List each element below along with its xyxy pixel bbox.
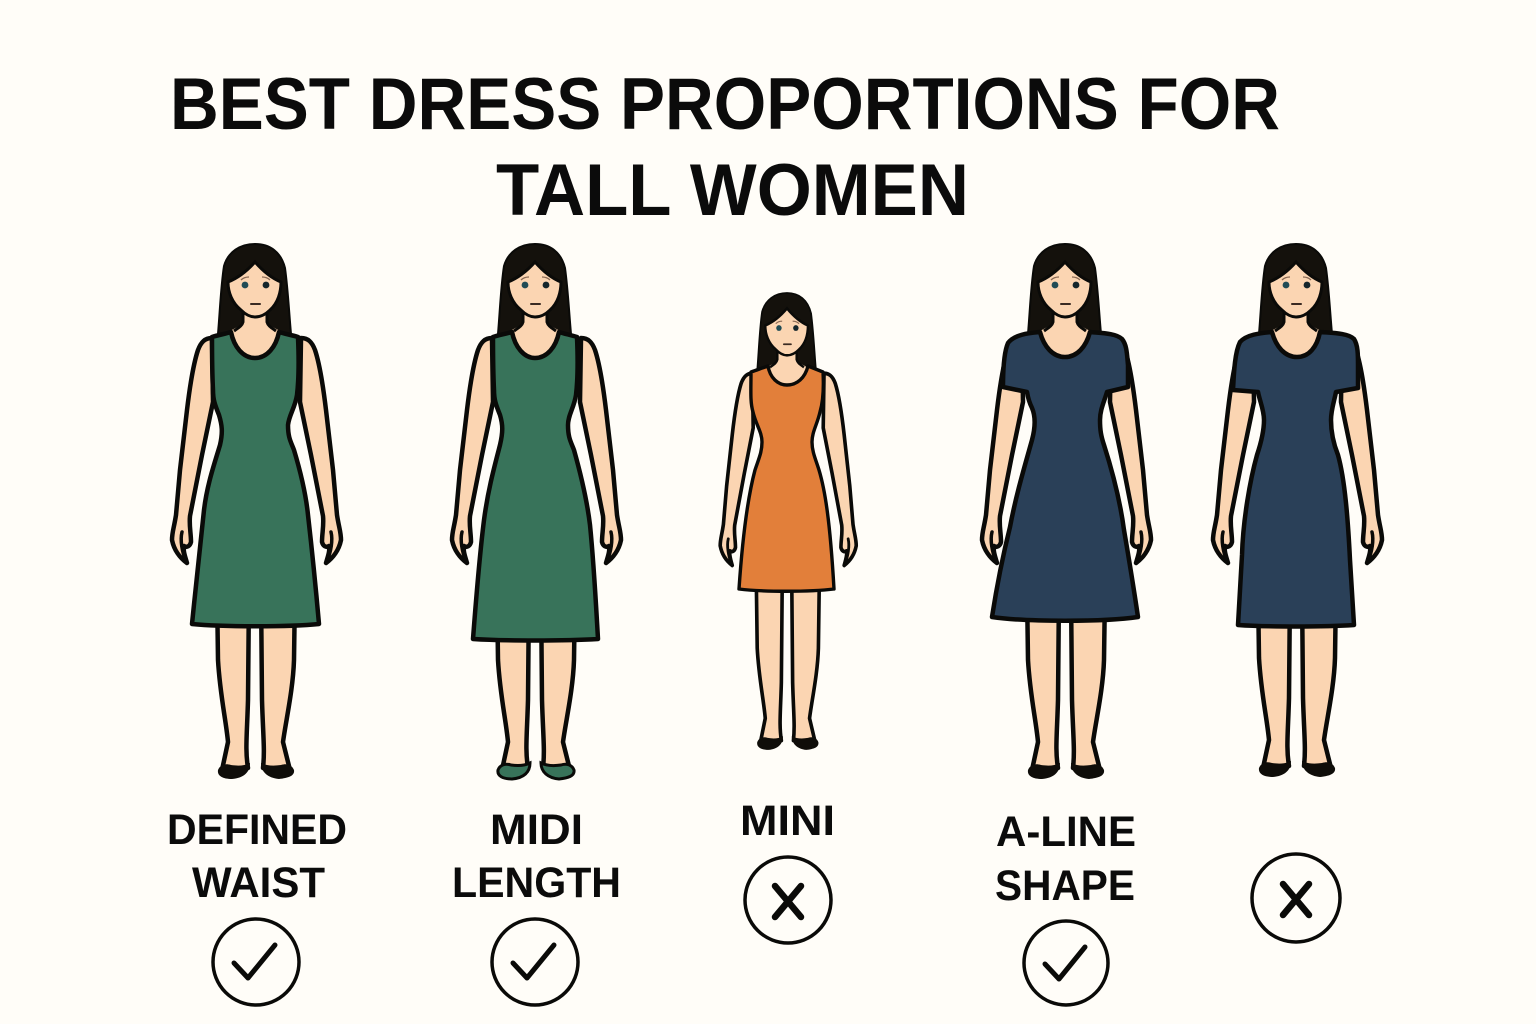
label: midi length: MIDI <box>490 806 583 854</box>
icon: x mark, mini <box>745 857 831 943</box>
label: a-line shape: A-LINE <box>996 808 1136 856</box>
label: a-line shape: SHAPE <box>995 862 1135 910</box>
icon: check mark, midi length <box>492 919 578 1005</box>
label: defined waist: WAIST <box>192 859 325 907</box>
figure: mini, orange dress <box>720 293 856 750</box>
figure body <box>982 244 1151 779</box>
figure: defined waist, green dress <box>172 244 341 779</box>
title <box>170 64 1280 231</box>
green midi dress <box>473 332 598 640</box>
label: mini: MINI <box>740 797 835 845</box>
navy a-line dress <box>992 332 1138 621</box>
green dress with defined waist <box>192 332 319 626</box>
icon: check mark, a-line shape <box>1024 921 1108 1005</box>
figure: a-line shape, navy dress <box>982 244 1151 779</box>
label: defined waist: DEFINED <box>167 806 347 854</box>
figure: navy straight dress <box>1213 244 1382 777</box>
icon: x mark, straight dress <box>1252 854 1340 942</box>
figure body <box>452 244 621 779</box>
figure body <box>720 293 856 750</box>
title: BEST DRESS PROPORTIONS FOR <box>170 64 1280 145</box>
figure: midi length, green dress <box>452 244 621 779</box>
title: TALL WOMEN <box>496 150 969 231</box>
figure body <box>1213 244 1382 777</box>
label: defined waist <box>167 806 347 907</box>
label: midi length <box>452 806 621 907</box>
navy straight dress <box>1233 332 1358 626</box>
label: midi length: LENGTH <box>452 859 621 907</box>
icon: check mark, defined waist <box>213 919 299 1005</box>
orange mini dress <box>739 366 834 591</box>
label: a-line shape <box>995 808 1136 910</box>
figure body <box>172 244 341 779</box>
